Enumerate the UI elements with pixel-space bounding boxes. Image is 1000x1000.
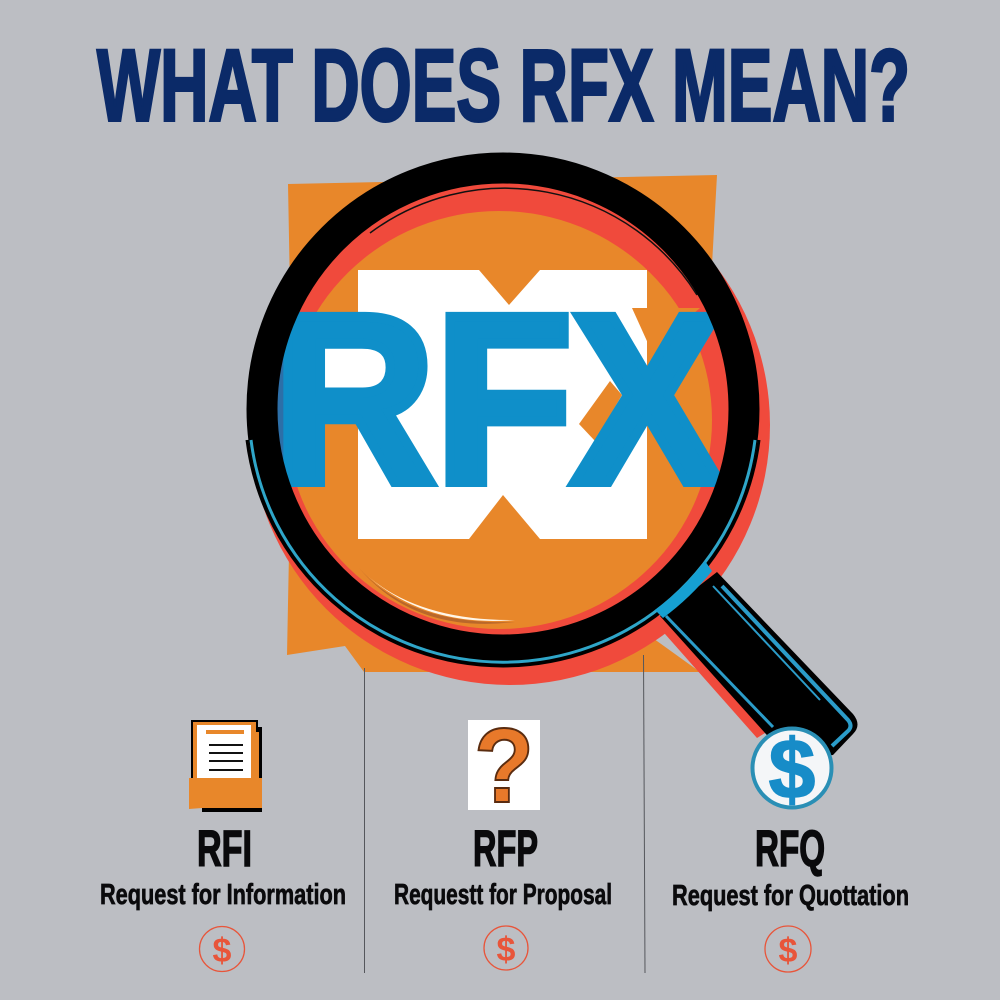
icon: large dollar coin	[752, 722, 832, 816]
column: RFP	[394, 707, 612, 970]
heading: RFP: RFP	[473, 820, 538, 877]
label: Request for Quottation: Request for Quottation	[672, 880, 909, 912]
column: RFQ	[672, 722, 909, 972]
magnifying glass	[247, 168, 858, 760]
big RFX lettering: RFX	[273, 265, 722, 533]
icon: document folder	[189, 720, 262, 812]
handle collar	[655, 561, 712, 618]
white counter behind R	[325, 348, 358, 388]
thin arc at lens top	[370, 188, 697, 295]
icon: small dollar: $	[213, 932, 232, 970]
lens contents	[270, 180, 740, 640]
heading: RFI: RFI	[197, 820, 252, 877]
handle shadow	[650, 612, 770, 738]
handle	[660, 572, 858, 760]
column: RFI	[100, 720, 346, 972]
highlight	[359, 568, 515, 624]
label: Requestt for Proposal: Requestt for Proposal	[394, 879, 612, 911]
white X block	[358, 270, 647, 539]
orange backing square	[287, 175, 717, 672]
heading: RFQ: RFQ	[755, 820, 825, 877]
lens ring	[247, 168, 759, 666]
icon: small dollar: $	[497, 931, 516, 969]
icon: small dollar	[765, 926, 811, 972]
icon: small dollar	[200, 926, 244, 972]
icon: small dollar	[484, 926, 528, 970]
red offset disc behind lens	[250, 165, 770, 685]
icon: large dollar coin: $	[769, 722, 815, 816]
orange notch in white block	[579, 308, 700, 441]
big RFX lettering	[278, 312, 720, 487]
icon: small dollar: $	[779, 932, 798, 970]
icon: question mark: ?	[474, 707, 534, 825]
label: Request for Information: Request for Information	[100, 879, 346, 911]
dividers between columns	[364, 655, 645, 973]
